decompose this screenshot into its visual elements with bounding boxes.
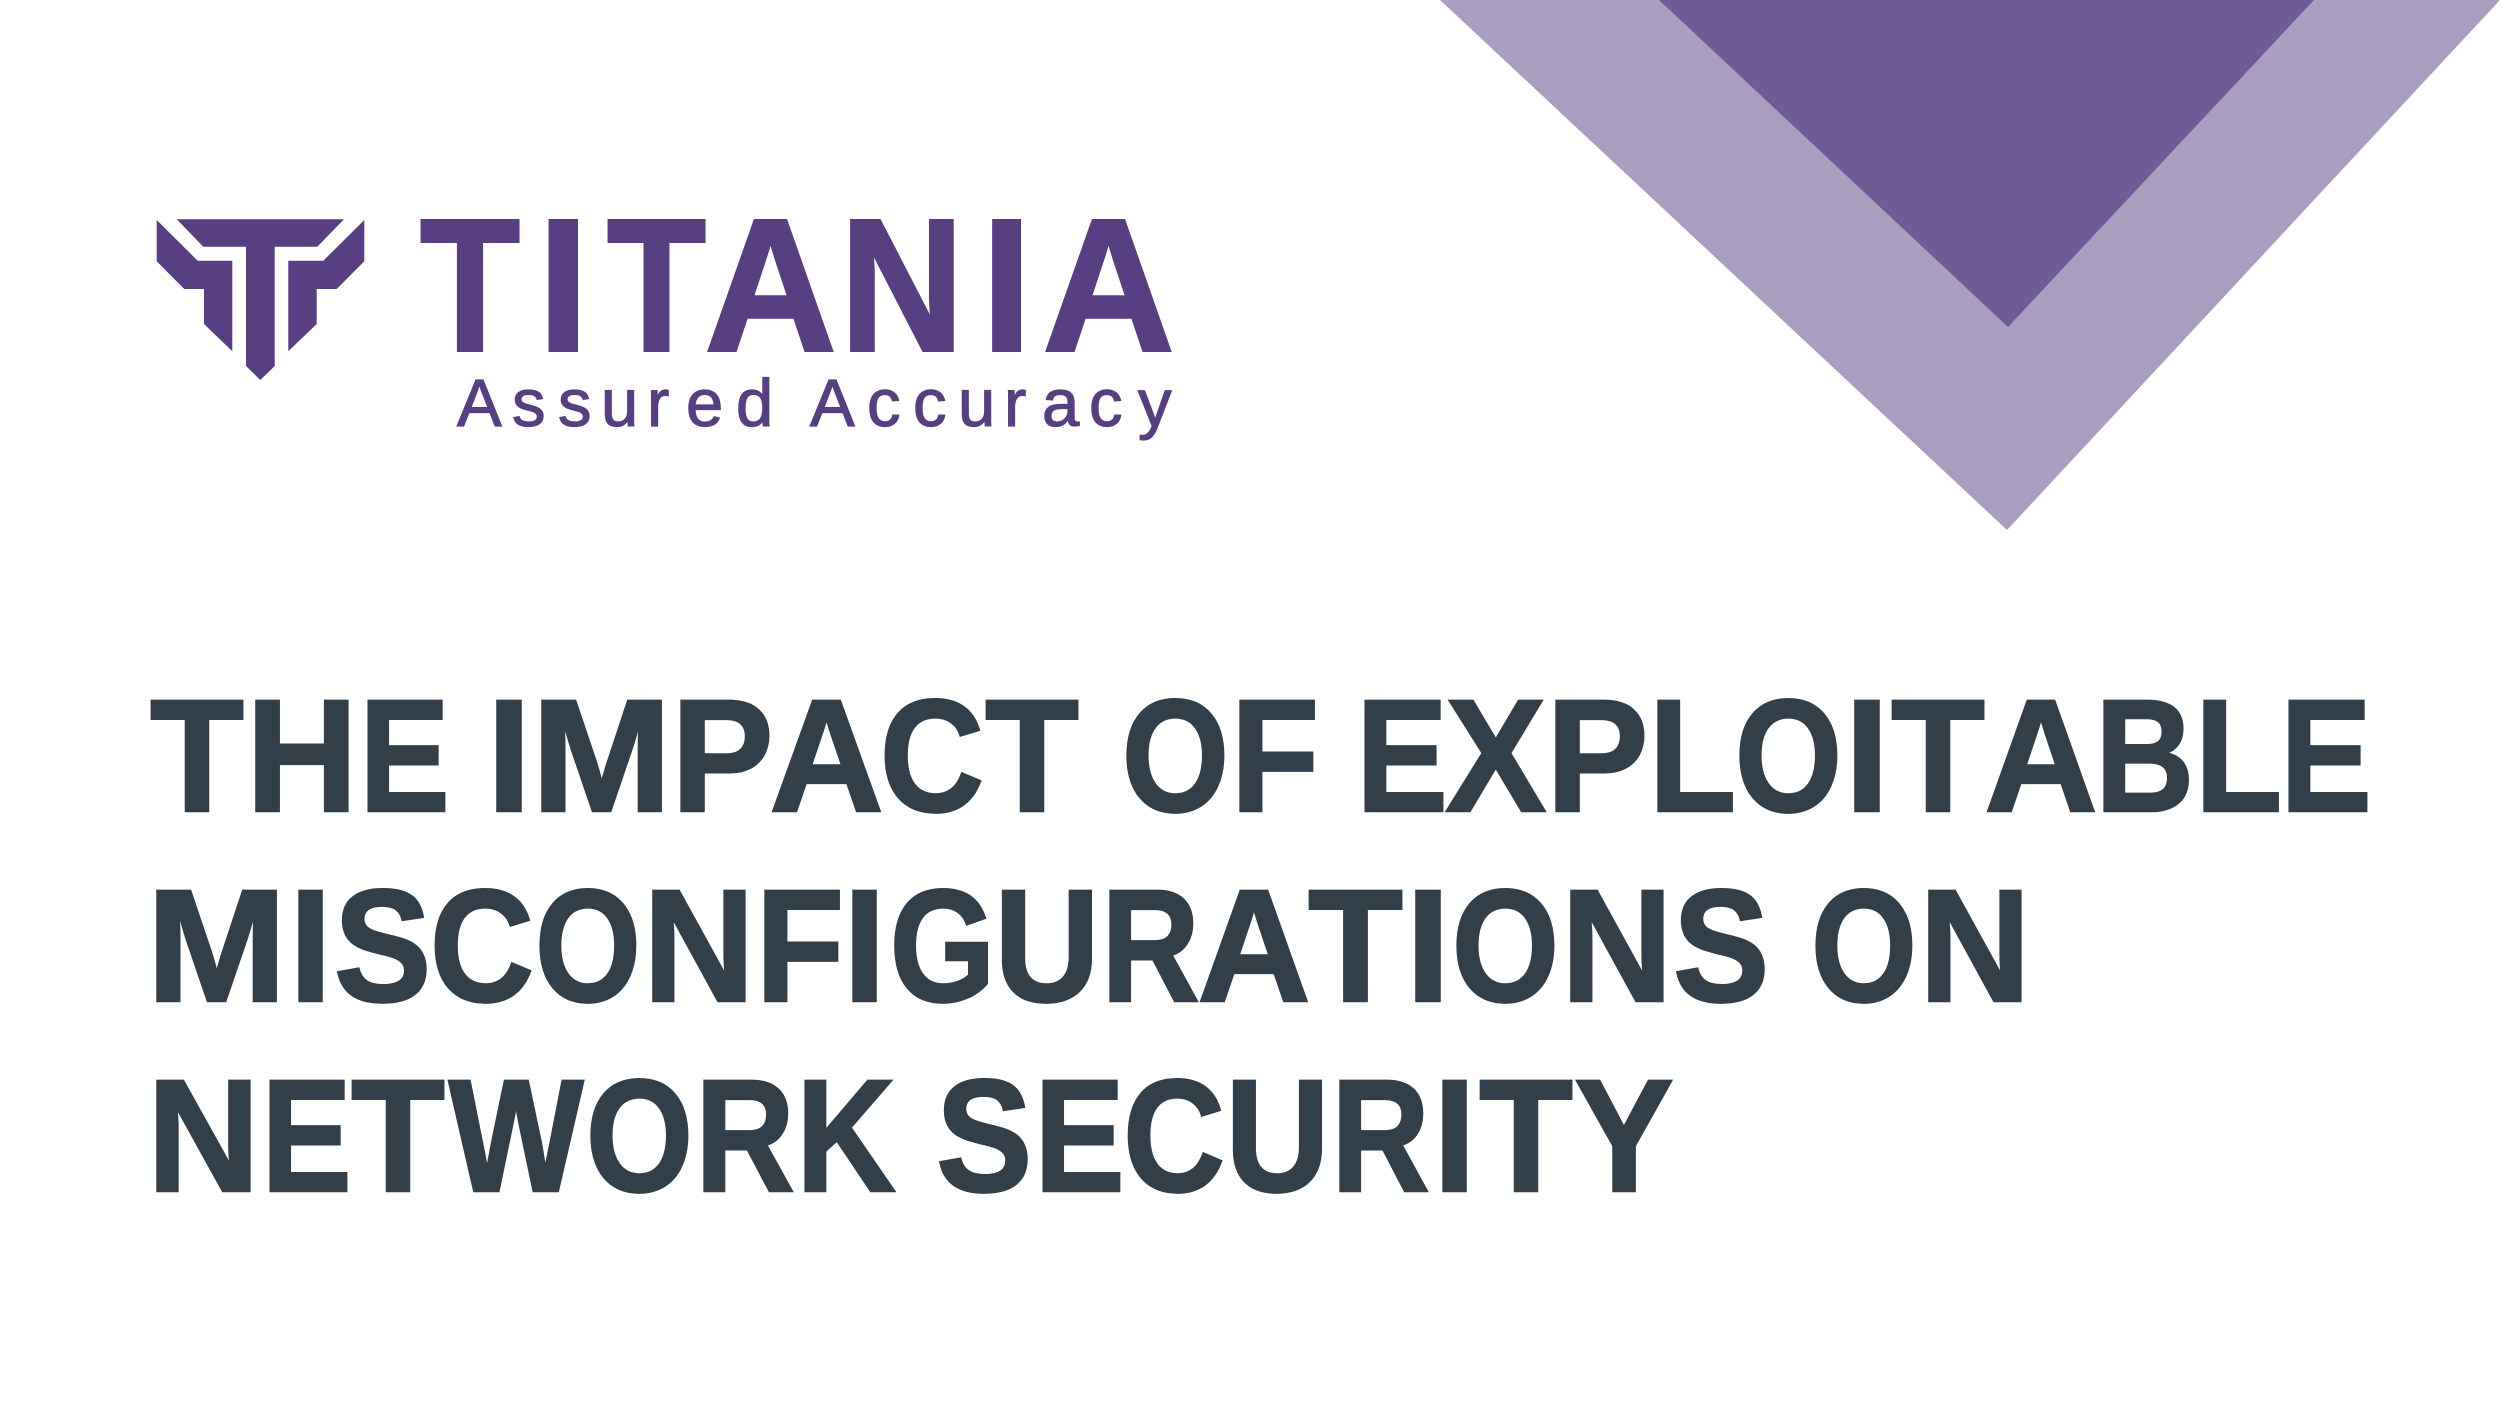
title line 1: P <box>671 666 774 845</box>
title line 1: F <box>1231 666 1319 845</box>
title line 2: M <box>146 856 287 1035</box>
title line 1 <box>150 666 2372 845</box>
title line 1: P <box>1546 666 1648 845</box>
title line 3: W <box>449 1046 584 1225</box>
icon: Titania T shield <box>157 219 364 380</box>
title line 1: E <box>2280 666 2372 845</box>
title line 2: T <box>1308 856 1403 1035</box>
logo: Titania <box>157 180 1174 441</box>
wordmark: A <box>1043 180 1174 392</box>
title line 2: R <box>1101 856 1200 1035</box>
title line 1: E <box>360 666 450 845</box>
title line 1: O <box>1122 666 1229 845</box>
title line 2: O <box>535 856 641 1035</box>
title line 2: C <box>430 856 534 1035</box>
title line 1: C <box>880 666 984 845</box>
title line 2: I <box>843 856 886 1035</box>
title line 3: N <box>147 1046 260 1225</box>
title line 3: Y <box>1574 1046 1674 1225</box>
title line 3 <box>147 1046 1674 1225</box>
title line 1: L <box>2195 666 2282 845</box>
title line 2: N <box>1919 856 2031 1035</box>
title line 2: I <box>1406 856 1450 1035</box>
title line 2: N <box>643 856 755 1035</box>
title line 2: F <box>756 856 844 1035</box>
title line 2: I <box>289 856 332 1035</box>
title line 1: A <box>1984 666 2098 845</box>
title line 1: T <box>985 666 1079 845</box>
title line 3: T <box>1479 1046 1573 1225</box>
title line 3: R <box>695 1046 795 1225</box>
tagline: Assured Accuracy <box>457 366 1172 441</box>
title line 2: G <box>890 856 995 1035</box>
title <box>146 666 2372 1225</box>
wordmark: T <box>420 180 520 392</box>
inner dark purple triangle <box>1659 0 2314 327</box>
title line 1: A <box>769 666 884 845</box>
title line 1: I <box>1845 666 1889 845</box>
title line 3: K <box>796 1046 896 1225</box>
title line 1: L <box>1649 666 1736 845</box>
title line 1: M <box>531 666 672 845</box>
decorative triangles: top right <box>1440 0 2500 530</box>
title line 2: O <box>1452 856 1559 1035</box>
title line 1: H <box>246 666 358 845</box>
title line 3: E <box>262 1046 352 1225</box>
title line 1: X <box>1446 666 1546 845</box>
outer light purple triangle <box>1440 0 2500 530</box>
title line 2: S <box>1673 856 1769 1035</box>
wordmark: N <box>840 180 964 392</box>
title line 1: O <box>1735 666 1842 845</box>
title line 3: E <box>1034 1046 1125 1225</box>
wordmark: I <box>538 180 589 392</box>
title line 3: U <box>1225 1046 1330 1225</box>
title line 3: C <box>1123 1046 1225 1225</box>
title line 3: O <box>586 1046 693 1225</box>
title line 2 <box>146 856 2031 1035</box>
title line 1: B <box>2095 666 2194 845</box>
title line 3: R <box>1331 1046 1430 1225</box>
title line 1: T <box>1891 666 1985 845</box>
wordmark: T <box>607 180 706 392</box>
title line 2: N <box>1561 856 1673 1035</box>
title line 1: E <box>1356 666 1448 845</box>
title line 2: U <box>994 856 1100 1035</box>
title line 3: I <box>1433 1046 1476 1225</box>
wordmark: I <box>982 180 1032 392</box>
title line 2: A <box>1197 856 1311 1035</box>
title line 1: T <box>150 666 244 845</box>
title line 2: S <box>334 856 431 1035</box>
title line 3: S <box>936 1046 1032 1225</box>
title line 2: O <box>1811 856 1917 1035</box>
title line 1: I <box>487 666 531 845</box>
wordmark: A <box>705 180 836 392</box>
title line 3: T <box>351 1046 445 1225</box>
